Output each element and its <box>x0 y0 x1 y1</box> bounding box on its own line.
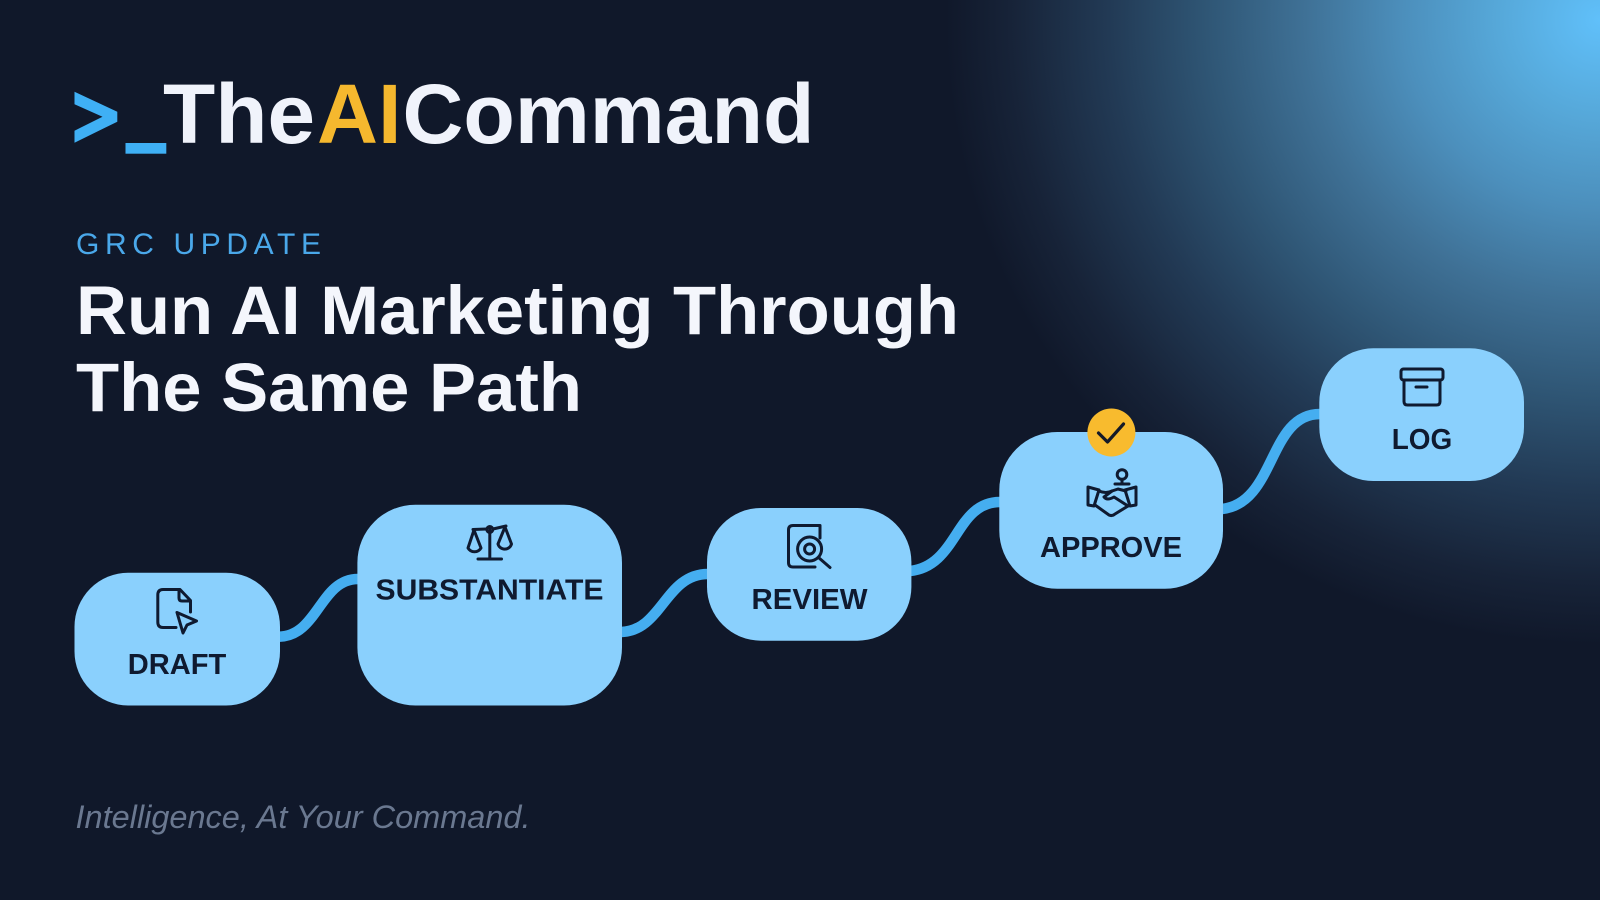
label: REVIEW <box>752 584 868 616</box>
step: DRAFT <box>74 573 280 706</box>
step: SUBSTANTIATE <box>357 505 622 706</box>
icon: handshake with person <box>1088 470 1136 516</box>
step: LOG <box>1319 348 1524 481</box>
main heading <box>76 272 959 426</box>
label: SUBSTANTIATE <box>376 574 604 606</box>
main heading: The Same Path <box>76 349 582 426</box>
label: DRAFT <box>128 649 227 681</box>
logo <box>74 67 814 161</box>
icon: balance scales <box>468 526 512 559</box>
label: APPROVE <box>1040 532 1182 564</box>
step: REVIEW <box>707 508 911 641</box>
logo wordmark: Command <box>402 67 814 161</box>
icon: archive box <box>1401 369 1443 405</box>
logo prompt icon <box>74 92 166 154</box>
logo wordmark <box>163 67 814 161</box>
icon: document with cursor <box>158 590 196 633</box>
eyebrow: GRC UPDATE: GRC UPDATE <box>76 228 321 261</box>
badge: approval check <box>1087 408 1135 456</box>
icon: document with magnifier <box>788 526 830 568</box>
process flow connectors <box>279 414 1320 637</box>
logo wordmark: The <box>163 67 315 161</box>
main heading: Run AI Marketing Through <box>76 272 959 349</box>
tagline: Intelligence, At Your Command. <box>76 799 530 835</box>
logo wordmark: AI <box>317 67 402 161</box>
icon: check mark <box>1098 424 1124 442</box>
step: APPROVE <box>999 432 1223 589</box>
label: LOG <box>1392 424 1452 456</box>
